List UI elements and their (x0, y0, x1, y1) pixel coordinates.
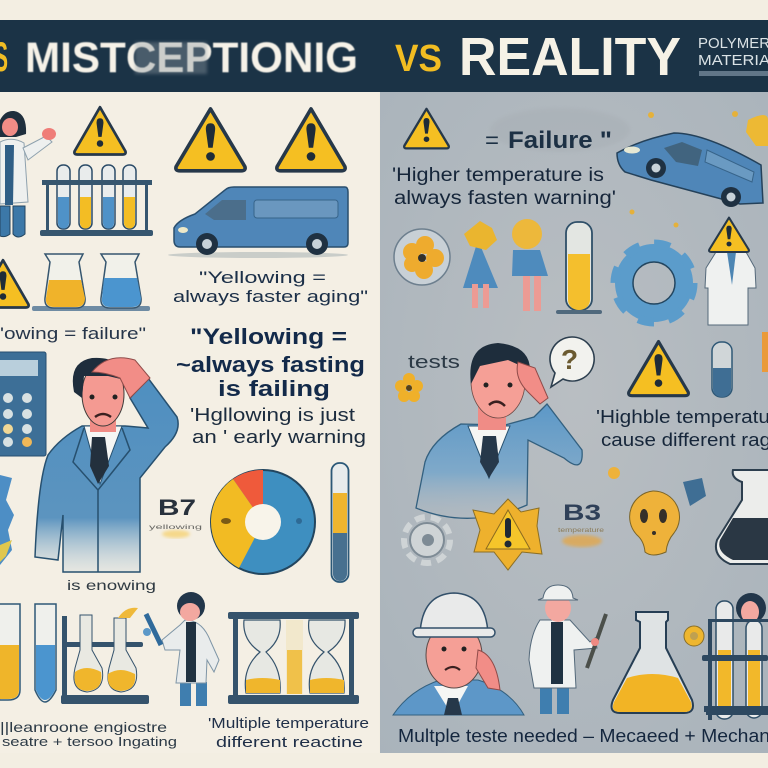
text: bottom left caption (0, 719, 177, 749)
icon: warning center right (629, 342, 688, 396)
text: higher temperature cause different: cause different rag (601, 430, 768, 450)
icon: yellow blob top right (746, 115, 768, 146)
icon: warning triangles (176, 109, 345, 171)
text: yellowing always fasting is failing: "Yellowing = (190, 324, 347, 349)
icon: tall tube (332, 463, 348, 582)
title left: MISTCEPTIONIG (25, 34, 358, 82)
icon: flasks (32, 254, 150, 311)
text: higher temperature cause different: 'Highble temperatu (596, 407, 768, 427)
icon: tube rack right (702, 593, 768, 720)
subtitle polymer materials: MATERIA (698, 52, 768, 69)
icon: speech bubble: ? (561, 344, 578, 375)
text: bottom left caption: seatre + tersoo Ingating (2, 734, 177, 749)
icon: small flower (395, 373, 423, 402)
icon: coin (684, 626, 704, 646)
icon: orange tag (762, 332, 768, 372)
icon: hourglass rack (228, 612, 359, 704)
text: is enowing: is enowing (67, 577, 156, 593)
icon: gear (615, 244, 693, 322)
text: yellowing always faster aging: "Yellowing = (199, 268, 326, 287)
text: tests: tests (408, 352, 460, 372)
label: B7: B7 (158, 495, 196, 520)
header banner (0, 20, 768, 92)
text: multiple temperature different reactions: different reactine (216, 734, 363, 751)
text: failure: Failure " (508, 127, 612, 154)
illustration: man with helmet (393, 593, 524, 715)
icon: warning cut off (0, 260, 29, 308)
text: yellowing is just an early warning (190, 405, 366, 447)
icon: calculator (0, 352, 46, 456)
icon: grey gear (404, 517, 450, 563)
icon: warning small (74, 107, 126, 154)
icon: blue object cut off (0, 475, 14, 565)
label: B7 (149, 495, 202, 538)
title reality: REALITY (459, 27, 681, 87)
text: yellowing always fasting is failing: ~always fasting (176, 352, 365, 377)
icon: tube with yellow liquid (556, 222, 602, 314)
icon: test tube rack (40, 165, 153, 236)
icon: starburst warning (473, 499, 542, 570)
text: bottom left caption: ||leanroone engiostre (0, 719, 167, 735)
icon: bottom test tubes (0, 604, 56, 702)
icon: dark flask (716, 470, 768, 564)
text: yellowing is just an early warning: an ' early warning (192, 427, 366, 447)
label: B3: B3 (563, 500, 601, 525)
text: higher temperature always fasten warning (392, 165, 616, 209)
icon: coat figure with warning head (705, 218, 756, 325)
panel: misconception (0, 92, 379, 753)
icon: speech bubble (550, 337, 594, 387)
text: higher temperature always fasten warning: always fasten warning' (394, 188, 616, 209)
text: yellowing is just an early warning: 'Hgllowing is just (190, 405, 355, 425)
title vs: VS (395, 38, 442, 80)
text: yellowing always fasting is failing: is failing (218, 376, 330, 401)
icon: figures with flower heads (463, 219, 548, 311)
text: yellowing always faster aging: always faster aging" (173, 287, 368, 306)
label: B3: temperature (558, 528, 605, 534)
label: B3 (558, 500, 605, 547)
text: yellowing always faster aging (173, 268, 368, 306)
label: B7: yellowing (149, 525, 202, 531)
panel: reality (380, 92, 768, 753)
icon: van (168, 187, 348, 258)
text: yellowing failure: 'owing = failure" (0, 324, 146, 343)
chart: donut pie (211, 470, 315, 574)
icon: yellow bulb face (608, 467, 706, 555)
icon: scientist top left (0, 111, 56, 237)
icon: flask stand (61, 608, 149, 704)
text: higher temperature cause different (596, 407, 768, 450)
text: yellowing always fasting is failing (176, 324, 365, 401)
icon: yellow flask (612, 612, 693, 713)
icon: flower circle (394, 229, 450, 285)
text: multiple tests needed: Multple teste needed – Mecaeed + Mechan (398, 726, 768, 746)
icon: blue tube right (712, 342, 732, 397)
icon: tilted van (617, 111, 763, 228)
text: multiple temperature different reactions: 'Multiple temperature (208, 715, 369, 732)
text: failure: = (485, 127, 499, 153)
subtitle polymer materials (698, 35, 768, 76)
text: multiple temperature different reactions (208, 715, 369, 751)
icon: helmet scientist (529, 585, 606, 714)
illustration: confused man left (35, 358, 178, 572)
icon: small scientist (143, 592, 219, 706)
illustration: worried man right (416, 343, 582, 518)
icon: warning right top (404, 109, 449, 148)
text: higher temperature always fasten warning: 'Higher temperature is (392, 165, 604, 186)
